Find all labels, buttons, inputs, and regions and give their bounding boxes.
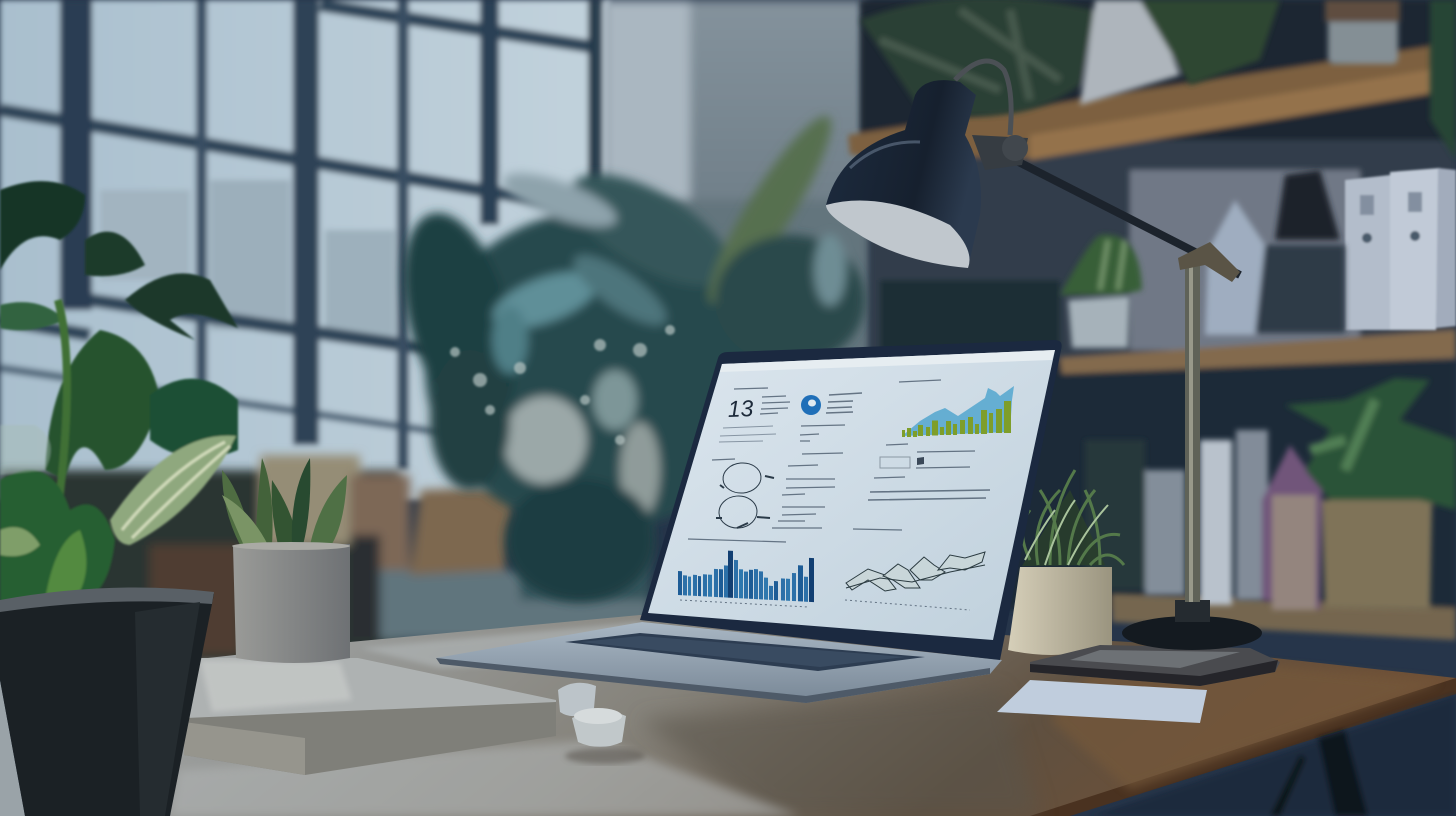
desk front edge	[1030, 678, 1456, 816]
concrete pot with succulent	[222, 458, 350, 663]
floor corner left of pot	[0, 680, 25, 816]
plants: centre foliage	[383, 105, 865, 602]
box and bottle on middle shelf	[1205, 170, 1345, 335]
laptop lid	[640, 340, 1062, 660]
lamp pole	[1185, 262, 1200, 602]
plant: left foliage	[0, 181, 238, 605]
plant in cream pot	[1008, 470, 1124, 655]
binders	[1345, 168, 1456, 330]
dark foreground pot	[0, 588, 214, 816]
lower line chart	[846, 552, 985, 591]
middle shelf	[1060, 330, 1456, 374]
lamp neck	[955, 61, 1011, 135]
small box on screen	[880, 457, 924, 468]
desk	[170, 615, 1456, 816]
succulent leaves	[222, 458, 347, 548]
desk lamp	[826, 61, 1262, 650]
book on desk	[184, 658, 556, 775]
background furniture and floor	[0, 455, 650, 670]
wall column	[600, 0, 870, 360]
under-desk area and leg	[1090, 695, 1456, 816]
lower bar chart	[678, 548, 814, 602]
window with mullions	[0, 0, 610, 500]
paper note on desk	[997, 680, 1207, 723]
laptop	[436, 340, 1062, 703]
objects on top shelf	[860, 0, 1456, 160]
lamp base	[1122, 600, 1262, 650]
lamp arm	[972, 135, 1240, 282]
background bokeh highlights	[450, 325, 675, 445]
big number: 13	[727, 395, 754, 422]
text lines on screen	[680, 380, 990, 610]
bottom shelf	[1112, 594, 1456, 640]
erasers on desk	[558, 683, 645, 764]
books and pot on lower shelf	[1085, 378, 1456, 610]
donut icon	[801, 395, 821, 415]
lamp shade	[826, 80, 981, 268]
laptop screen	[648, 350, 1055, 640]
circle diagrams	[716, 461, 774, 530]
upper area chart	[902, 386, 1014, 437]
plant in white pot on shelf	[1060, 235, 1142, 348]
shelves and wall behind them	[848, 0, 1456, 640]
tablet on desk	[1030, 645, 1280, 686]
laptop base	[436, 622, 1002, 703]
top shelf	[848, 45, 1440, 160]
